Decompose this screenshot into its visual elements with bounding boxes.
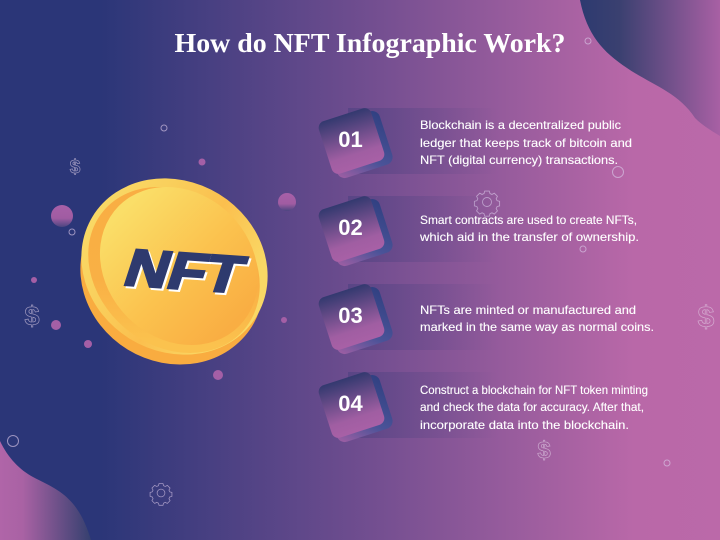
step 4 — [317, 368, 651, 445]
icons: dollar signs: $ — [698, 301, 715, 334]
step 1 badge — [317, 104, 395, 181]
decorative rings — [8, 38, 670, 466]
step 3 text: NFTs are minted or manufactured and — [420, 303, 636, 317]
step 4 text: Construct a blockchain for NFT token minting — [420, 383, 648, 397]
icon: gear lower left — [150, 483, 172, 505]
step 1 band — [348, 108, 498, 174]
title: How do NFT Infographic Work? — [174, 28, 566, 58]
step 3 text: marked in the same way as normal coins. — [420, 320, 654, 334]
step 4 number: 04 — [338, 391, 363, 416]
icon: gear centre — [474, 191, 500, 216]
bottom-left wave — [0, 441, 91, 540]
step 4 band — [348, 372, 498, 438]
step 4 text: and check the data for accuracy. After that, — [420, 400, 644, 414]
coin label: NFT — [120, 241, 254, 306]
step 2 text: Smart contracts are used to create NFTs, — [420, 213, 637, 227]
icons: dollar signs — [24, 157, 715, 464]
step 3 band — [348, 284, 498, 350]
step 2 text: which aid in the transfer of ownership. — [419, 230, 639, 244]
step 2 badge — [317, 192, 395, 269]
coin label: NFT — [118, 239, 252, 304]
step 3 badge — [317, 280, 395, 357]
step 1 text: NFT (digital currency) transactions. — [420, 153, 618, 167]
NFT coin — [47, 144, 301, 399]
step 4 badge — [317, 368, 395, 445]
decorative floating spheres — [31, 158, 296, 380]
step 2 — [317, 192, 640, 269]
icons: dollar signs: $ — [70, 157, 81, 178]
icons: dollar signs: $ — [24, 301, 40, 331]
step 1 text: ledger that keeps track of bitcoin and — [420, 136, 632, 150]
top-right wave — [580, 0, 720, 136]
step 2 number: 02 — [338, 215, 363, 240]
step 1 — [317, 104, 635, 181]
step 3 number: 03 — [338, 303, 363, 328]
step 1 number: 01 — [338, 127, 363, 152]
step 4 text: incorporate data into the blockchain. — [420, 418, 629, 432]
icons: dollar signs: $ — [537, 437, 551, 464]
step 3 — [317, 280, 654, 357]
step 1 text: Blockchain is a decentralized public — [420, 118, 621, 132]
step 2 band — [348, 196, 498, 262]
